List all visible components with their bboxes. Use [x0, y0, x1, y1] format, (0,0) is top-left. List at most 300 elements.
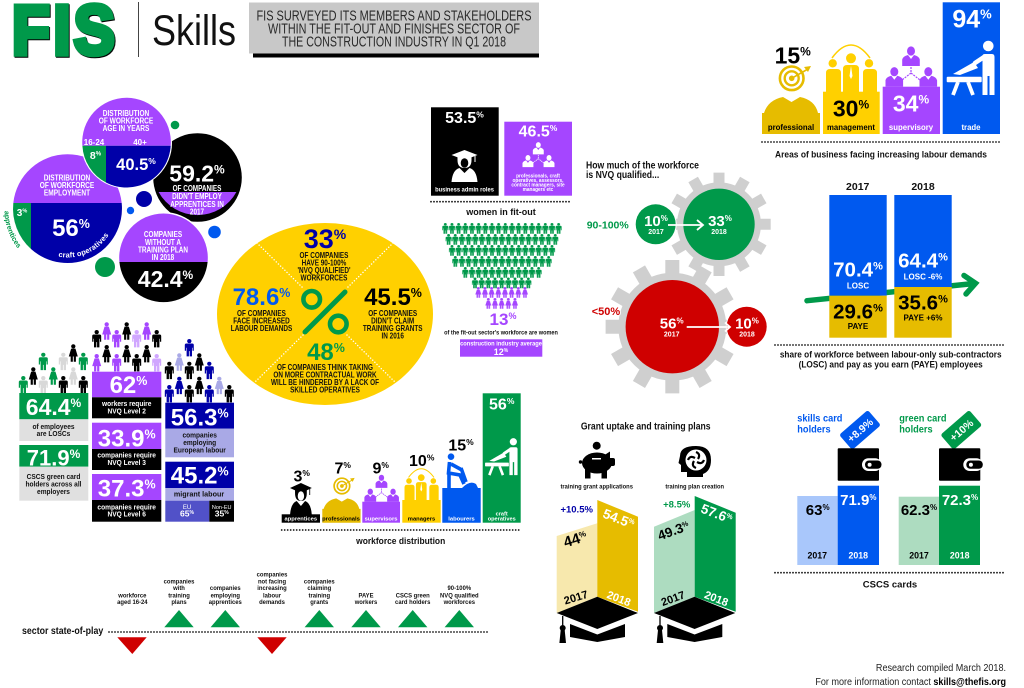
panel: sector state-of-play: [22, 571, 490, 654]
marker: companies not facing increasing labour demands: not facing: [258, 578, 286, 585]
circle: age distribution: %: [96, 152, 102, 158]
people: LOSC group: [19, 344, 88, 393]
group: green card holders: [899, 410, 983, 565]
column: 2018: 35.6: [898, 291, 938, 314]
marker: companies not facing increasing labour demands: increasing: [257, 585, 287, 592]
stat: 45.5%: OF COMPANIES: [368, 308, 417, 318]
stat: 37.3% level 6: NVQ Level 6: [107, 511, 146, 519]
stat: 33%: [297, 224, 351, 283]
stat: 56.3% European labour: %: [217, 407, 229, 421]
stat: 71.9% green card: 71.9: [27, 446, 70, 470]
marker: companies claiming training grants: training: [309, 592, 330, 599]
circle: age distribution: 40+: [133, 138, 147, 147]
chart: training grant applications: 2018: [605, 589, 632, 609]
marker: companies not facing increasing labour demands: [257, 571, 288, 654]
stat: 64.4% LOSCs: [19, 393, 88, 441]
logo: FIS Skills: [12, 0, 236, 69]
marker: 90-100% NVQ qualified workforces: [440, 585, 479, 627]
circle: age distribution: [81, 98, 172, 188]
card: other roles: professionals, craft: [516, 173, 560, 179]
column: 2017: LOSC: [847, 281, 869, 290]
bar: managers: 10: [409, 453, 427, 470]
panel: grant uptake and training plans: training plan creation: [665, 483, 724, 490]
marker: companies not facing increasing labour demands: labour: [263, 592, 281, 599]
stat: 33%: 33: [304, 224, 334, 254]
stat: 78.6%: FACE INCREASED: [233, 316, 290, 326]
stat: 56.3% European labour: 56.3: [171, 405, 217, 432]
arrow: trend: [807, 276, 976, 301]
callout: industry average: 12: [494, 347, 504, 357]
group: skills card holders: +8.9%: [845, 416, 876, 445]
bar: professional: [762, 42, 820, 134]
stat: 45.2% migrant labour: [165, 462, 234, 522]
circle: age distribution: AGE IN YEARS: [103, 123, 150, 133]
stat: 13% women: 13: [490, 310, 508, 329]
stat: 71.9% green card: employers: [37, 489, 70, 496]
bar: professional: 15: [775, 42, 800, 68]
group: skills card holders: skills card: [797, 413, 842, 425]
heading: women in fit-out: women in fit-out: [465, 207, 536, 217]
marker: companies employing apprentices: employing: [211, 592, 240, 599]
bar: managers: %: [427, 452, 435, 462]
stat: 45.5%: IN 2016: [382, 331, 404, 341]
circle: apprentices not employed 59.2%: OF COMPANIES: [173, 185, 222, 193]
bar: managers: [402, 452, 441, 523]
gear: under 50%: %: [676, 316, 684, 325]
marker: PAYE workers: PAYE: [358, 592, 374, 599]
marker: companies with training plans: with: [172, 585, 185, 592]
stat: 48%: [271, 339, 379, 395]
circle: workforce employment: craft operatives: [58, 234, 108, 258]
marker: companies with training plans: companies: [164, 578, 195, 585]
circle: workforce employment: [3, 154, 122, 263]
card: business admin roles: 53.5: [445, 110, 476, 127]
chart: training grant applications: +10.5%: [560, 505, 593, 516]
chart: training grant applications: 54.5: [601, 506, 631, 529]
group: skills card holders: 63: [806, 502, 822, 519]
stat: 45.2% migrant labour: %: [190, 510, 195, 516]
marker: companies not facing increasing labour demands: demands: [259, 599, 285, 606]
bar: apprentices: [282, 468, 320, 523]
bar: craft operatives: [483, 393, 521, 523]
bar: management: %: [858, 98, 869, 112]
stat: 33%: 'NVQ QUALIFIED': [297, 265, 351, 275]
stat: 37.3% level 6: [92, 474, 161, 522]
stat: 45.2% migrant labour: %: [224, 510, 229, 516]
column: 2018: [894, 181, 952, 338]
bar: managers: managers: [408, 517, 435, 523]
gear: 90-100%: %: [725, 214, 732, 223]
gear: 90-100%: 90-100%: [587, 219, 629, 231]
bar: supervisors: [362, 460, 400, 523]
stat: 48%: WILL BE HINDERED BY A LACK OF: [271, 377, 379, 387]
bar: professional: %: [800, 44, 811, 58]
heading: how much NVQ qualified: [586, 160, 699, 180]
chart: training plan creation: [654, 496, 736, 643]
bar: management: [823, 45, 880, 134]
group: skills card holders: %: [869, 493, 876, 502]
circle: no training plan: IN 2018: [152, 253, 174, 262]
group: green card holders: 2018: [950, 550, 970, 560]
stat: 64.4% LOSCs: of employees: [32, 424, 75, 431]
column: 2017: %: [873, 261, 883, 273]
column: 2017: %: [873, 302, 883, 314]
bar: labourers: [442, 437, 481, 523]
stat: 48%: OF COMPANIES THINK TAKING: [277, 362, 373, 372]
bar: management: 30: [833, 96, 858, 122]
stat: 33%: WORKFORCES: [301, 273, 348, 283]
marker: companies employing apprentices: [209, 585, 242, 627]
bar: professionals: %: [343, 460, 351, 470]
panel: women in fit-out: [431, 107, 572, 357]
stat: 37.3% level 6: companies require: [97, 504, 156, 511]
marker: workforce aged 16-24: [117, 592, 148, 654]
stat: 62% level 2: 62: [110, 372, 136, 399]
group: green card holders: green card: [899, 413, 946, 425]
card: other roles: managers etc: [523, 187, 553, 193]
stat: 62% level 2: NVQ Level 2: [107, 408, 146, 416]
caption: share of workforce: [780, 349, 1002, 370]
marker: PAYE workers: workers: [354, 599, 378, 606]
header banner: WITHIN THE FIT-OUT AND FINISHES SECTOR OF: [268, 21, 520, 37]
column: 2018: 64.4: [898, 250, 938, 273]
bar: trade: %: [980, 6, 992, 21]
panel: areas of business facing labour demands: [762, 2, 1000, 159]
circle: no training plan: COMPANIES: [144, 231, 182, 239]
stat: 45.2% migrant labour: Non-EU: [212, 505, 232, 511]
bar: supervisors: supervisors: [365, 517, 397, 523]
group: skills card holders: 2017: [808, 550, 827, 560]
circle: workforce employment: apprentices: [3, 211, 20, 248]
gear: under 50%: 10: [735, 315, 752, 332]
marker: companies claiming training grants: grants: [310, 599, 329, 606]
card: other roles: [504, 122, 572, 196]
marker: CSCS green card holders: CSCS green: [396, 592, 430, 599]
circle: no training plan: 42.4: [138, 266, 183, 292]
stat: 45.2% migrant labour: %: [217, 464, 229, 478]
circle: apprentices not employed 59.2%: %: [214, 163, 225, 177]
circle: no training plan: TRAINING PLAN: [138, 246, 188, 255]
stat: 56.3% European labour: European labour: [174, 447, 226, 455]
gear: 90-100%: 33: [708, 213, 725, 230]
bar: craft operatives: craft: [496, 512, 508, 518]
people: labour group: [165, 339, 234, 402]
group: skills card holders: %: [822, 503, 830, 512]
marker: companies not facing increasing labour demands: companies: [257, 571, 288, 579]
heading: grant uptake: Grant uptake and training plans: [581, 421, 711, 431]
stat: 45.2% migrant labour: 65: [180, 509, 190, 519]
gear: 90-100%: [587, 173, 771, 276]
group: green card holders: %: [971, 493, 978, 502]
marker: PAYE workers: [351, 592, 381, 627]
marker: workforce aged 16-24: workforce: [117, 592, 147, 599]
caption: CSCS cards: CSCS cards: [863, 580, 917, 591]
card: other roles: operatives, assessors,: [513, 178, 564, 184]
circle: workforce employment: %: [79, 217, 90, 231]
chart: training plan creation: 49.3: [656, 520, 685, 543]
panel: NVQ qualified gears: [586, 160, 771, 393]
panel: CSCS cards: [775, 410, 1006, 591]
stat: 62% level 2: workers require: [101, 401, 151, 408]
stat: 64.4% LOSCs: %: [71, 396, 82, 410]
group: green card holders: 62.3: [901, 502, 930, 519]
icon: percent sign: [303, 291, 347, 332]
bar: supervisory: 34: [893, 91, 918, 117]
marker: companies with training plans: plans: [171, 599, 187, 606]
circle: age distribution: 8: [90, 150, 96, 162]
gear: under 50%: <50%: [592, 306, 620, 318]
bar: supervisory: [883, 46, 940, 134]
stat: 56.3% European labour: companies: [182, 432, 217, 440]
bar: labourers: labourers: [448, 517, 475, 523]
bar: supervisory: supervisory: [889, 123, 934, 132]
chart: training grant applications: [557, 500, 638, 643]
stat: 48%: %: [334, 341, 345, 355]
footer: research note: Research compiled March 2018.: [876, 662, 1006, 674]
panel: yellow key statistics ellipse: [217, 223, 433, 405]
group: skills card holders: 2018: [849, 550, 868, 560]
marker: companies claiming training grants: [304, 578, 335, 627]
group: green card holders: %: [930, 503, 937, 512]
stat: 62% level 2: %: [136, 374, 147, 388]
column: 2018: PAYE +6%: [904, 314, 942, 323]
footer: research note: For more information contact skills@thefis.org: [815, 676, 1006, 688]
chart: training grant applications: 2017: [563, 589, 590, 607]
card: business admin roles: [431, 107, 499, 196]
group: green card holders: 2017: [909, 550, 929, 560]
chart: training plan creation: 2018: [702, 589, 730, 609]
stat: 45.5%: DIDN'T CLAIM: [371, 316, 414, 326]
callout: industry average: %: [504, 348, 509, 354]
panel: LOSC vs PAYE share: [775, 181, 1006, 370]
heading: sector state-of-play: sector state-of-play: [22, 626, 104, 636]
logo: FIS Skills: Skills: [152, 7, 236, 55]
stat: 45.2% migrant labour: 35: [215, 509, 224, 519]
people: NVQ group: [92, 322, 161, 371]
circle: apprentices not employed 59.2%: [153, 133, 242, 222]
gear: 90-100%: 2018: [711, 229, 727, 236]
group: green card holders: 72.3: [942, 492, 971, 509]
circle: workforce employment: 56: [52, 215, 79, 242]
marker: workforce aged 16-24: aged 16-24: [117, 599, 148, 606]
circle: age distribution: DISTRIBUTION: [103, 108, 149, 118]
bar: management: management: [827, 123, 875, 132]
column: 2018: 2018: [911, 181, 935, 193]
group: skills card holders: [797, 410, 882, 565]
stat: 64.4% LOSCs: are LOSCs: [37, 431, 70, 438]
bar: apprentices: apprentices: [285, 517, 317, 523]
stat: 78.6%: LABOUR DEMANDS: [231, 323, 292, 333]
group: green card holders: holders: [899, 424, 933, 436]
callout: industry average: [460, 339, 542, 357]
heading: how much NVQ qualified: is NVQ qualified...: [586, 169, 659, 180]
panel: LOSC people and stats: [19, 344, 88, 501]
panel: workforce distribution: [282, 393, 521, 546]
footer: research note: [815, 662, 1006, 688]
gear: under 50%: [592, 260, 768, 393]
marker: companies with training plans: training: [168, 592, 190, 599]
circle: no training plan: [118, 212, 209, 303]
stat: 78.6%: 78.6: [233, 284, 279, 311]
circle: workforce employment: 3: [17, 208, 22, 219]
chart: training grant applications: 44: [562, 530, 582, 551]
panel: NVQ level requirements: [92, 322, 161, 522]
column: 2018: LOSC -6%: [904, 272, 942, 281]
stat: 45.5%: %: [411, 286, 422, 300]
bar: craft operatives: %: [507, 396, 515, 406]
stat: 78.6%: OF COMPANIES: [237, 308, 286, 318]
bar: craft operatives: 56: [489, 396, 507, 413]
stat: 45.2% migrant labour: EU: [183, 505, 191, 511]
stat: 78.6%: [231, 284, 292, 333]
stat: 13% women: %: [508, 311, 516, 321]
stat: 62% level 2: [92, 372, 161, 418]
marker: 90-100% NVQ qualified workforces: NVQ qualified: [440, 592, 479, 599]
stat: 33%: OF COMPANIES: [300, 250, 349, 260]
gear: 90-100%: %: [661, 214, 668, 223]
circle: age distribution: OF WORKFORCE: [99, 116, 153, 126]
callout: industry average: construction industry average: [460, 340, 542, 348]
bar: apprentices: 3: [293, 469, 302, 486]
stat: 48%: 48: [307, 339, 334, 366]
circle: age distribution: %: [148, 156, 156, 166]
bar: professional: professional: [768, 123, 814, 132]
column: 2017: 70.4: [833, 259, 873, 282]
bar: professionals: 7: [334, 460, 343, 477]
stat: 78.6%: %: [279, 286, 290, 300]
decorative bubbles: [95, 121, 221, 277]
chart: training grant applications: %: [627, 518, 636, 527]
circle: workforce employment: OF WORKFORCE: [40, 180, 94, 190]
column: 2017: [829, 181, 887, 338]
group: skills card holders: 71.9: [840, 492, 869, 509]
panel: European and migrant labour: [165, 339, 234, 522]
stat: 13% women: [444, 310, 558, 336]
marker: 90-100% NVQ qualified workforces: workforces: [443, 599, 475, 606]
panel: grant uptake and training plans: [557, 421, 736, 643]
panel: grant uptake and training plans: training grant applications: [560, 483, 633, 490]
chart: training grant applications: %: [578, 529, 587, 540]
gear: 90-100%: 2017: [648, 229, 664, 236]
circle: apprentices not employed 59.2%: 2017: [190, 208, 204, 217]
bar: apprentices: %: [302, 468, 310, 478]
stat: 71.9% green card: %: [70, 447, 81, 461]
stat: 33.9% level 3: %: [144, 428, 156, 442]
circle: age distribution: 16-24: [84, 138, 105, 147]
card: other roles: 46.5: [519, 124, 550, 141]
stat: 33%: %: [334, 226, 347, 242]
circle: no training plan: WITHOUT A: [145, 238, 181, 247]
card: business admin roles: business admin roles: [435, 186, 494, 193]
icon: head with training cogs: [678, 446, 711, 477]
bar: labourers: 15: [448, 438, 466, 455]
icon: piggy bank: [579, 442, 615, 478]
bar: supervisors: %: [381, 460, 389, 470]
marker: CSCS green card holders: [395, 592, 431, 627]
bar: supervisors: 9: [372, 460, 381, 477]
stat: 33.9% level 3: [92, 423, 161, 470]
stat: 71.9% green card: [19, 445, 88, 501]
stat: 45.2% migrant labour: 45.2: [171, 462, 217, 490]
gear: under 50%: 2018: [739, 332, 755, 339]
bar: professionals: [322, 460, 361, 523]
chart: training plan creation: %: [725, 513, 734, 522]
group: green card holders: +10%: [948, 417, 977, 444]
pictogram: workforce pyramid: [442, 223, 562, 309]
bar: trade: 94: [952, 5, 980, 33]
chart: training plan creation: 57.6: [699, 501, 729, 524]
card: business admin roles: %: [476, 110, 484, 120]
gear: 90-100%: 10: [644, 213, 661, 230]
bar: labourers: %: [466, 437, 474, 447]
card: other roles: %: [550, 123, 558, 133]
circle: workforce employment: %: [22, 208, 27, 214]
stat: 33.9% level 3: companies require: [97, 452, 156, 460]
stat: 45.5%: 45.5: [364, 284, 411, 311]
chart: training plan creation: %: [681, 520, 690, 529]
stat: 45.5%: TRAINING GRANTS: [363, 323, 423, 333]
stat: 71.9% green card: CSCS green card: [27, 474, 80, 481]
chart: training plan creation: +8.5%: [663, 499, 691, 510]
column: 2017: 2017: [846, 181, 870, 193]
bar: trade: [943, 2, 1000, 134]
header banner: FIS SURVEYED ITS MEMBERS AND STAKEHOLDERS: [256, 9, 532, 25]
stat: 48%: ON MORE CONTRACTUAL WORK: [273, 370, 377, 380]
caption: workforce distribution: workforce distribution: [355, 536, 445, 546]
circle: apprentices not employed 59.2%: APPRENTICES IN: [170, 200, 224, 209]
circle: workforce employment: EMPLOYMENT: [44, 188, 91, 198]
circle: workforce employment: DISTRIBUTION: [44, 173, 90, 183]
gear: under 50%: 56: [660, 315, 676, 332]
column: 2017: PAYE: [848, 322, 869, 331]
marker: companies claiming training grants: claiming: [307, 585, 331, 592]
header banner: THE CONSTRUCTION INDUSTRY IN Q1 2018: [282, 34, 506, 50]
stat: 71.9% green card: holders across all: [26, 481, 82, 489]
bar: craft operatives: operatives: [488, 517, 516, 523]
column: 2018: %: [938, 293, 948, 305]
gear: under 50%: %: [752, 316, 759, 325]
caption: share of workforce: (LOSC) and pay as you earn (PAYE) employees: [799, 359, 983, 370]
stat: 33.9% level 3: NVQ Level 3: [107, 460, 146, 467]
bar: supervisory: %: [918, 93, 929, 107]
circle: age distribution: 40.5: [116, 156, 148, 174]
stat: 48%: SKILLED OPERATIVES: [290, 385, 360, 395]
stat: 45.2% migrant labour: migrant labour: [174, 490, 224, 499]
gear: under 50%: 2017: [664, 332, 680, 339]
marker: companies with training plans: [164, 578, 195, 627]
bar: trade: trade: [961, 123, 981, 132]
stat: 45.5%: [363, 284, 423, 341]
marker: companies employing apprentices: apprentices: [209, 599, 242, 606]
marker: 90-100% NVQ qualified workforces: 90-100%: [448, 585, 471, 592]
circle: no training plan: %: [183, 268, 194, 282]
stat: 13% women: of the fit-out sector's workforce are women: [444, 329, 558, 336]
marker: CSCS green card holders: card holders: [395, 599, 431, 606]
column: 2018: %: [938, 252, 948, 264]
column: 2017: 29.6: [833, 300, 873, 323]
stat: 33%: HAVE 90-100%: [302, 258, 347, 268]
stat: 37.3% level 6: %: [144, 478, 156, 492]
heading: how much NVQ qualified: How much of the workforce: [586, 160, 699, 170]
circle: apprentices not employed 59.2%: 59.2: [169, 161, 214, 187]
stat: 56.3% European labour: [165, 403, 234, 457]
card: other roles: contract managers, site: [511, 182, 565, 189]
stat: 64.4% LOSCs: 64.4: [26, 394, 71, 420]
stat: 37.3% level 6: 37.3: [98, 476, 144, 503]
circle: apprentices not employed 59.2%: DIDN'T EMPLOY: [172, 192, 222, 201]
caption: areas of business: Areas of business facing increasing labour demands: [775, 149, 987, 159]
chart: training plan creation: 2017: [660, 589, 687, 609]
